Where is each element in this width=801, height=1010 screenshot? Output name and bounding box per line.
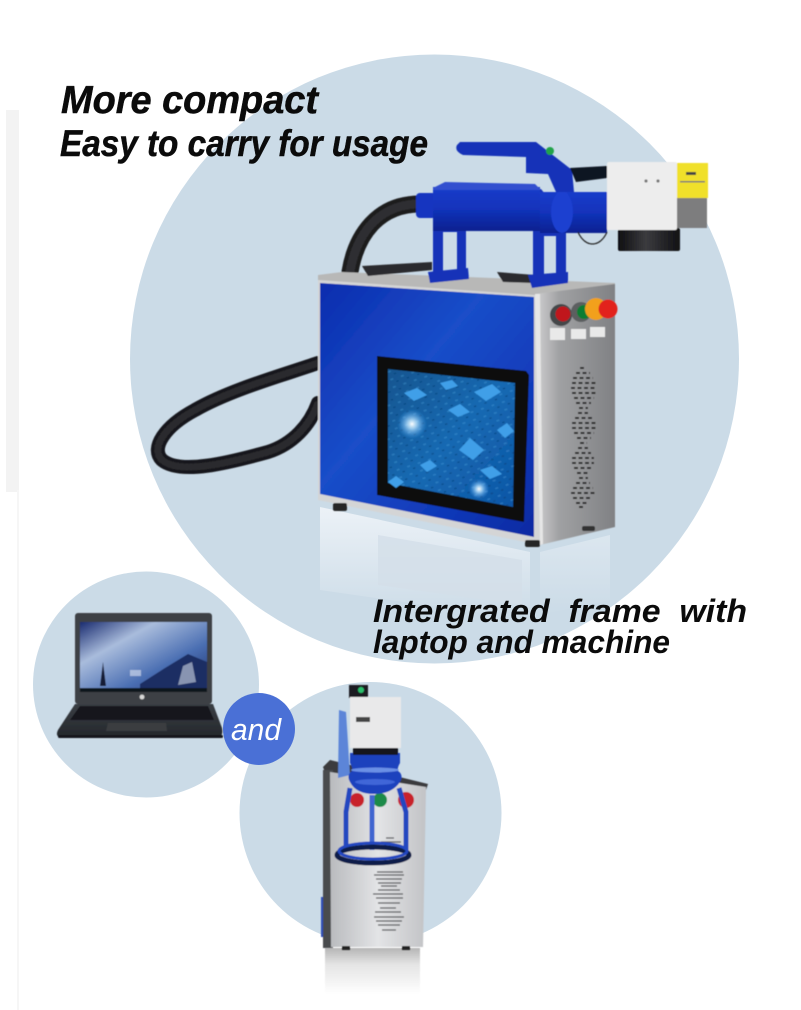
control buttons [350, 792, 414, 808]
and badge: and [231, 712, 283, 747]
mounting stands [428, 189, 568, 288]
laser tube [416, 182, 607, 233]
rating text lines [373, 838, 404, 930]
machine, rear view [321, 685, 428, 950]
heading: more compact: More compact [61, 79, 320, 122]
top latches [362, 262, 535, 283]
laptop base [57, 704, 223, 738]
heading: easy to carry: Easy to carry for usage [60, 123, 428, 164]
machine reflection [320, 507, 610, 620]
ventilation holes [571, 368, 597, 507]
scan head [349, 685, 401, 755]
cabinet [321, 760, 428, 950]
machine case [318, 272, 615, 547]
caption: integrated frame [373, 593, 747, 660]
machine reflection, rear view [325, 948, 420, 994]
caption: integrated frame: laptop and machine [373, 624, 670, 660]
laptop background circle [33, 572, 259, 798]
blue mount [337, 710, 409, 863]
and badge [223, 693, 295, 765]
left edge strip [6, 110, 19, 1010]
portable laser marking machine [158, 142, 708, 547]
laptop [57, 613, 223, 738]
touch screen [377, 356, 529, 522]
scan head [578, 162, 708, 251]
control buttons [550, 298, 618, 340]
machine background circle [240, 682, 502, 944]
fiber hose [158, 204, 420, 467]
caption: integrated frame: Intergrated frame with [373, 593, 747, 629]
large background circle [130, 54, 739, 664]
laptop lid [75, 613, 212, 704]
handle [456, 142, 607, 192]
